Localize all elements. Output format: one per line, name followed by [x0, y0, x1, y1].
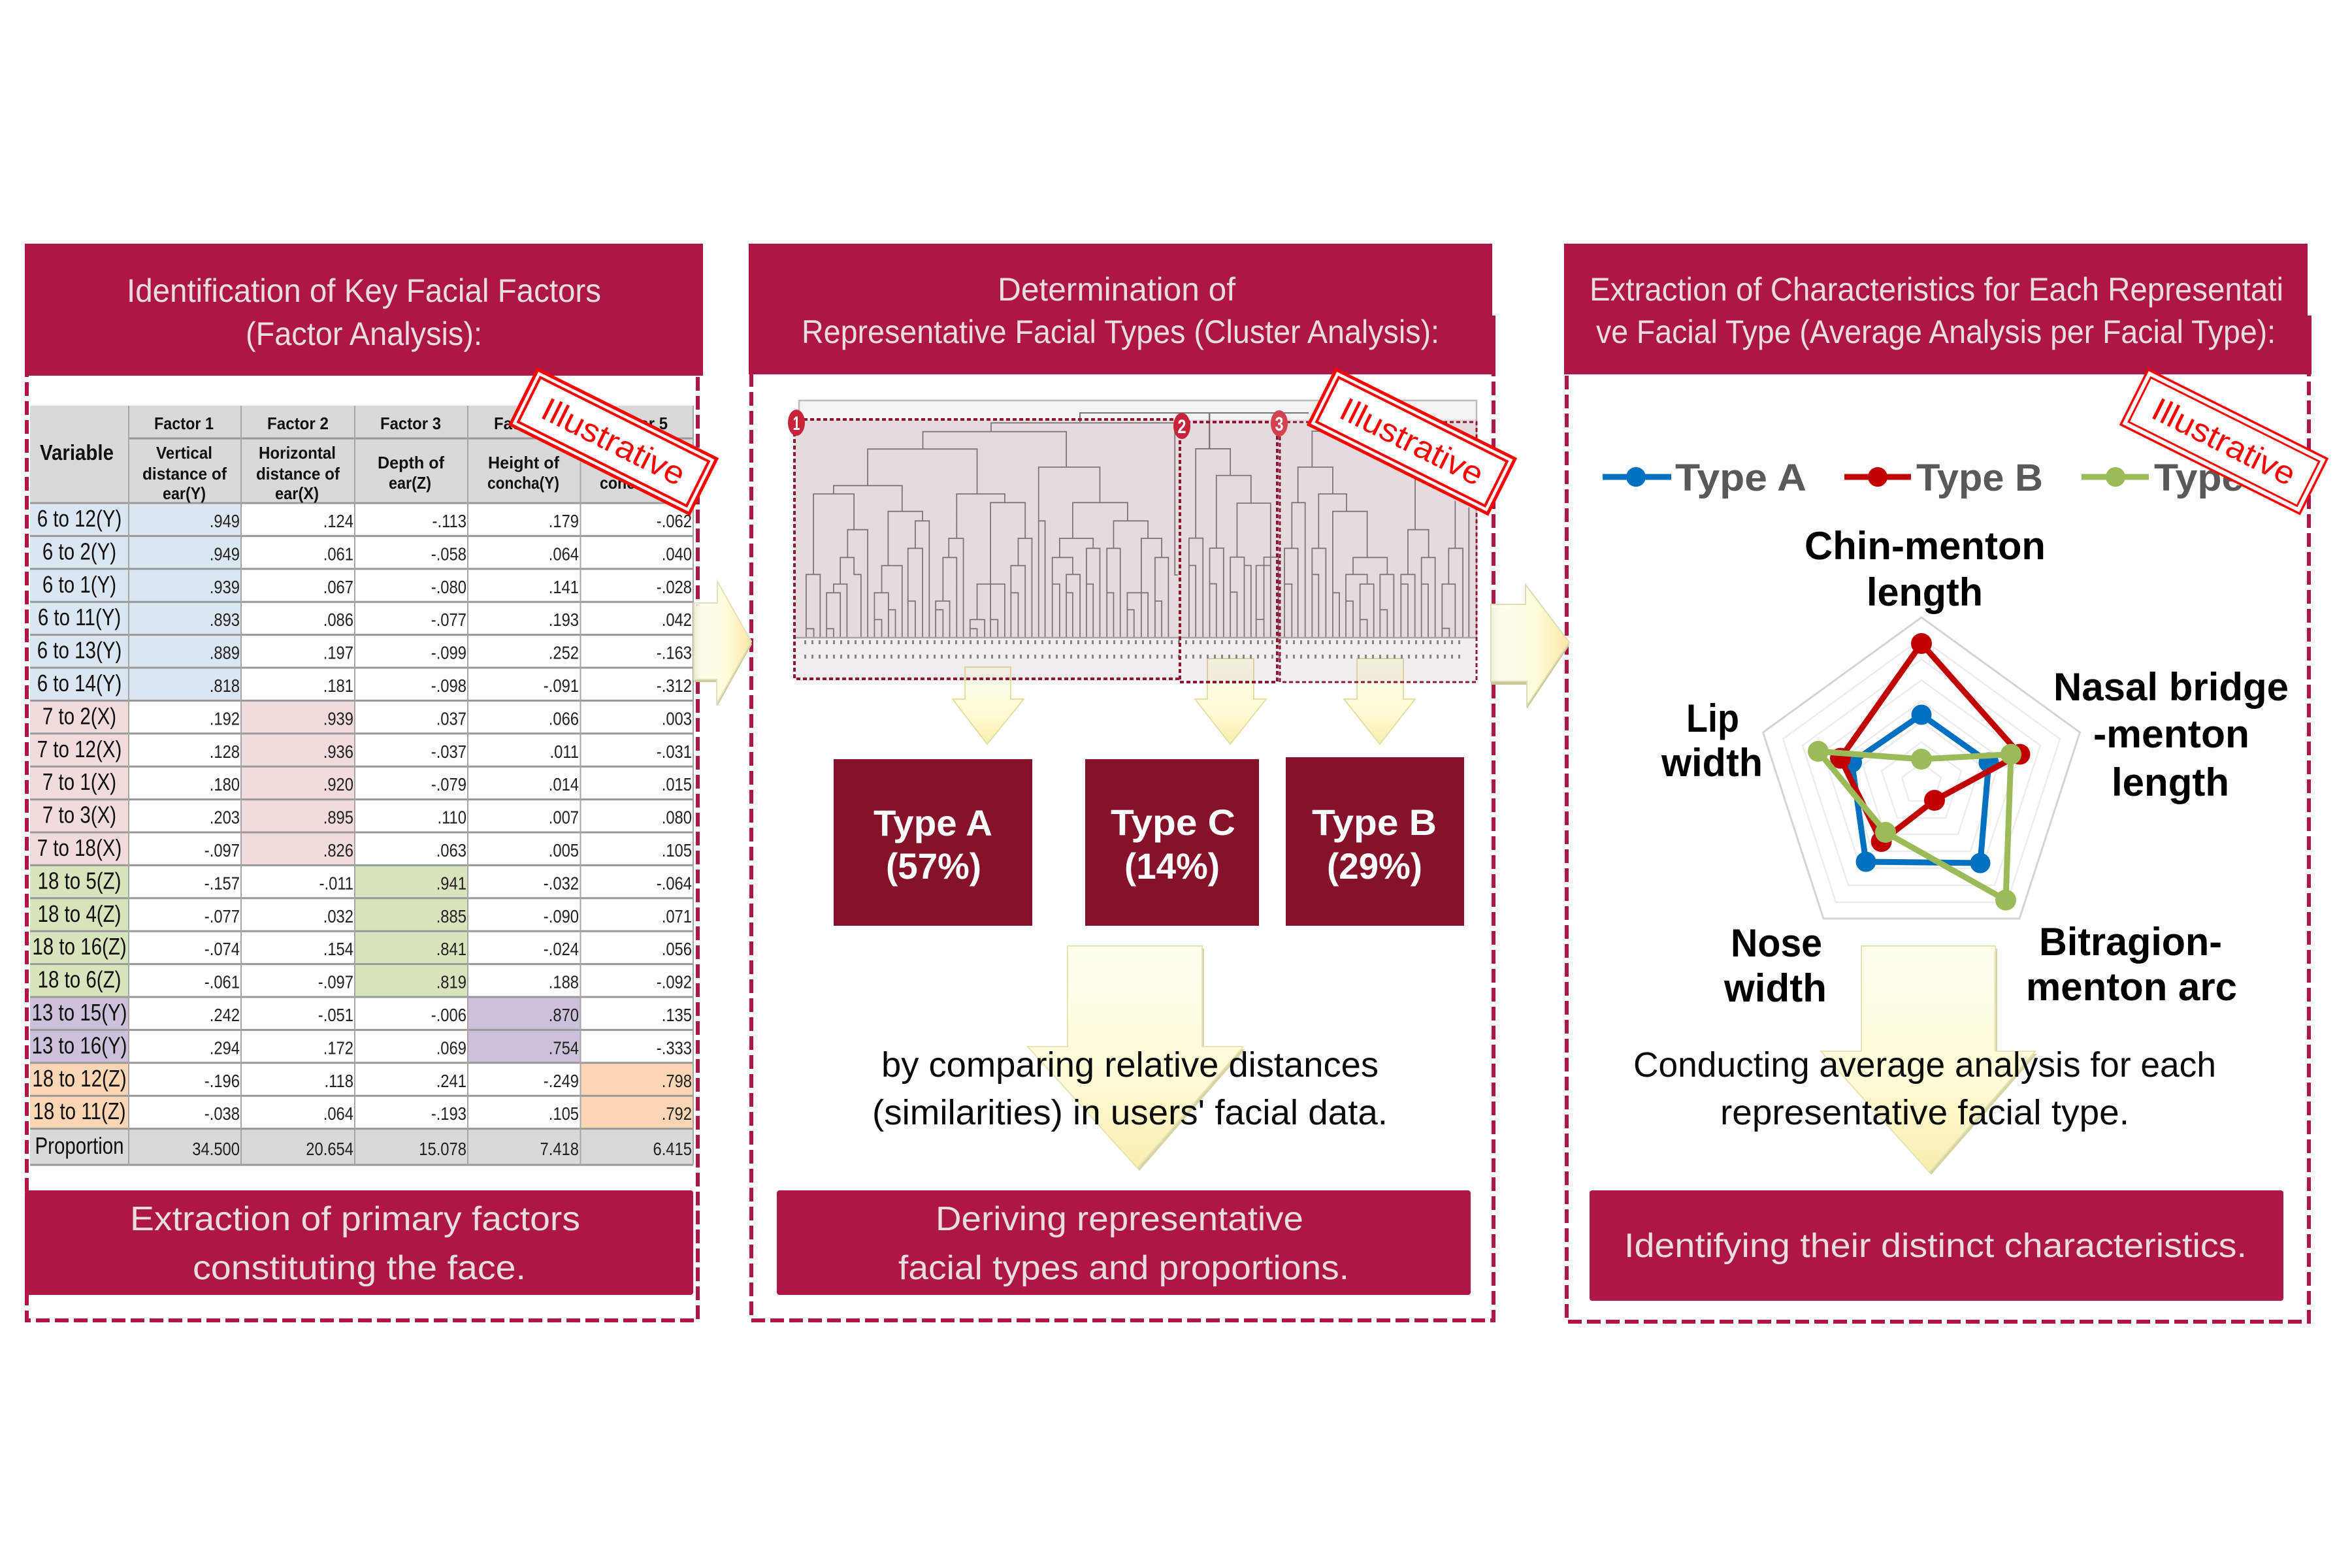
chart legend	[1603, 457, 2283, 499]
type a box: Type A	[874, 802, 992, 843]
radar grid	[1763, 617, 2080, 919]
header: average analysis	[1564, 244, 2311, 374]
factor 5 values: -.163	[657, 642, 692, 663]
table column headers: Factor 1	[154, 414, 214, 433]
factor 2 values: .064	[323, 1103, 353, 1124]
header: factor analysis: (Factor Analysis):	[246, 316, 482, 352]
panel: factor analysis	[25, 244, 717, 1320]
arrow: cluster analysis to average analysis	[1491, 585, 1569, 709]
factor 1 values: .192	[210, 708, 240, 729]
factor 3 values: -.113	[433, 510, 466, 531]
variable labels: 7 to 3(X)	[42, 802, 116, 828]
factor 5 values: .080	[662, 807, 692, 828]
factor 1 values: .203	[210, 807, 240, 828]
factor 4 values: .011	[550, 741, 579, 762]
axis label: chin-menton length: Chin-menton	[1805, 524, 2046, 568]
axis label: nasal bridge-menton length: length	[2112, 760, 2229, 804]
axis label: nose width	[1723, 921, 1827, 1010]
factor 5 values: .798	[662, 1070, 692, 1091]
factor 3 values: -.193	[431, 1103, 466, 1124]
factor 5 values: .135	[662, 1004, 692, 1025]
chart legend: Type A	[1675, 457, 1806, 499]
panel: cluster analysis	[749, 244, 1515, 1320]
factor 4 values: -.249	[544, 1070, 579, 1091]
cluster number badges: 2	[1177, 416, 1186, 438]
variable labels: 7 to 1(X)	[42, 768, 116, 795]
header: cluster analysis: Determination of	[998, 271, 1235, 308]
variable labels: 18 to 6(Z)	[38, 966, 121, 992]
cluster description text: by comparing relative distances	[881, 1045, 1379, 1085]
factor 5 values: .056	[662, 938, 692, 960]
factor 4 values: .064	[549, 544, 579, 564]
stamp: illustrative: Illustrative	[536, 391, 691, 493]
factor 4 values: -.091	[544, 675, 579, 696]
factor 5 values: .792	[662, 1103, 692, 1124]
footer: primary factors: constituting the face.	[193, 1249, 526, 1287]
footer: distinct characteristics	[1590, 1190, 2283, 1301]
factor 3 values: -.077	[431, 609, 466, 630]
factor 2 values: -.051	[318, 1004, 353, 1025]
small arrows from dendrogram to types	[953, 659, 1415, 744]
variable labels: 6 to 1(Y)	[42, 571, 116, 597]
factor 2 values: .181	[323, 675, 353, 696]
factor 2 values: .154	[323, 938, 353, 960]
factor 5 values: .042	[662, 609, 692, 630]
factor 2 values: .067	[323, 576, 353, 597]
factor 1 values: -.038	[204, 1103, 240, 1124]
axis label: bitragion-menton arc	[2026, 920, 2237, 1009]
axis label: lip width: Lip	[1686, 696, 1739, 740]
type b box: Type B	[1312, 802, 1437, 843]
factor 4 values	[540, 510, 579, 1159]
factor 5 values: -.064	[657, 873, 692, 894]
factor 3 values: .241	[436, 1070, 466, 1091]
factor 1 values: -.196	[204, 1070, 240, 1091]
table column headers: Factor 3	[380, 414, 441, 433]
factor 1 values: .949	[210, 544, 240, 564]
table column headers: concha(X)	[600, 473, 673, 493]
factor 3 values: -.006	[431, 1004, 466, 1025]
factor 5 values: -.092	[657, 972, 692, 992]
table column headers: ear(Y)	[163, 483, 206, 503]
type b box	[1286, 757, 1464, 926]
factor 4 values: .754	[549, 1037, 579, 1058]
variable labels: Proportion	[35, 1132, 124, 1159]
type a box	[834, 759, 1032, 926]
header: average analysis: Extraction of Characteristics for Each Representati	[1590, 271, 2283, 308]
factor 1 values: .818	[210, 675, 240, 696]
factor 4 values: -.090	[544, 906, 579, 926]
factor 2 values: .118	[324, 1070, 353, 1091]
arrow: factor analysis to cluster analysis	[694, 581, 752, 706]
variable labels: 6 to 14(Y)	[37, 670, 122, 696]
radar chart	[1661, 524, 2289, 1010]
footer: primary factors: Extraction of primary factors	[130, 1200, 580, 1238]
axis label: chin-menton length	[1805, 524, 2046, 614]
factor 4 values: .014	[549, 774, 579, 795]
factor 1 values: -.157	[204, 873, 240, 894]
factor 3 values: -.080	[431, 576, 466, 597]
factor 4 values: .007	[549, 807, 579, 828]
cluster number badges	[788, 410, 1288, 439]
factor 5 values: -.028	[657, 576, 692, 597]
factor 1 values: -.077	[204, 906, 240, 926]
footer: distinct characteristics: Identifying their distinct characteristics.	[1624, 1227, 2247, 1265]
panel: average analysis	[1564, 244, 2327, 1322]
factor 5 values: .071	[662, 906, 692, 926]
factor 2 values: .920	[323, 774, 353, 795]
factor 3 values: .063	[436, 840, 466, 860]
variable labels: 7 to 12(X)	[37, 736, 122, 762]
big arrow: chart to characteristics	[1821, 946, 2037, 1175]
factor 5 values	[653, 510, 692, 1159]
factor 2 values: .061	[323, 544, 353, 564]
series: type a	[1842, 704, 1999, 873]
factor 3 values: -.098	[431, 675, 466, 696]
factor 1 values: .180	[210, 774, 240, 795]
variable labels: 6 to 2(Y)	[42, 538, 116, 564]
variable labels	[32, 505, 127, 1159]
variable labels: 18 to 12(Z)	[32, 1065, 127, 1091]
factor 3 values: -.058	[431, 544, 466, 564]
table column headers: distance of	[142, 464, 227, 483]
factor 2 values: .939	[323, 708, 353, 729]
cluster 3 tree	[1284, 431, 1469, 638]
factor 2 values: .086	[323, 609, 353, 630]
factor 3 values: .819	[436, 972, 466, 992]
factor 5 values: .040	[662, 544, 692, 564]
type a box: (57%)	[886, 845, 981, 887]
factor 4 values: .179	[549, 510, 579, 531]
chart legend: Type B	[1916, 457, 2043, 499]
average analysis description text: representative facial type.	[1720, 1093, 2129, 1132]
factor 1 values: -.097	[204, 840, 240, 860]
header: cluster analysis: Representative Facial Types (Cluster Analysis):	[802, 314, 1439, 350]
table column headers: Vertical	[156, 443, 212, 463]
table column headers: Horizontal	[259, 443, 336, 463]
factor loading table	[30, 406, 693, 1165]
series: type c	[1808, 741, 2021, 911]
factor 4 values: 7.418	[540, 1138, 579, 1159]
footer: representative facial types: Deriving representative	[936, 1200, 1303, 1238]
variable labels: 18 to 11(Z)	[33, 1098, 126, 1124]
factor 5 values: .003	[662, 708, 692, 729]
factor 3 values: 15.078	[419, 1138, 466, 1159]
table column headers: ear(Z)	[389, 473, 431, 493]
table column headers	[40, 414, 673, 503]
factor 3 values: -.037	[431, 741, 466, 762]
factor 5 values: 6.415	[653, 1138, 692, 1159]
variable labels: 13 to 15(Y)	[32, 999, 127, 1026]
dendrogram chart	[788, 400, 1477, 682]
footer: representative facial types: facial types and proportions.	[898, 1249, 1349, 1287]
factor 1 values	[192, 510, 240, 1159]
factor 3 values: .841	[436, 938, 466, 960]
factor 2 values: .936	[323, 741, 353, 762]
axis label: lip width	[1661, 696, 1763, 785]
stamp: illustrative	[2121, 370, 2327, 514]
factor 5 values: .015	[662, 774, 692, 795]
variable labels: 18 to 16(Z)	[32, 933, 127, 960]
axis label: lip width: width	[1661, 741, 1763, 785]
factor 1 values: .294	[210, 1037, 240, 1058]
factor 3 values: -.079	[431, 774, 466, 795]
axis label: chin-menton length: length	[1867, 570, 1983, 614]
table column headers: Factor 5	[607, 414, 668, 433]
big arrow: types to proportions	[1028, 946, 1245, 1171]
type b box: (29%)	[1327, 845, 1422, 887]
factor 5 values: -.333	[657, 1037, 692, 1058]
axis label: nasal bridge-menton length: Nasal bridge	[2053, 665, 2289, 709]
stamp: illustrative	[510, 370, 717, 514]
factor 4 values: .252	[549, 642, 579, 663]
factor 3 values: .110	[437, 807, 466, 828]
axis label: nose width: width	[1723, 966, 1827, 1010]
factor 1 values: -.061	[204, 972, 240, 992]
header: factor analysis: Identification of Key Facial Factors	[127, 272, 601, 309]
table column headers: Depth of	[378, 453, 444, 472]
factor 4 values: .141	[549, 576, 579, 597]
factor 3 values: .941	[436, 873, 466, 894]
type c box	[1085, 759, 1259, 926]
series: type b	[1830, 633, 2031, 852]
factor 1 values: .889	[210, 642, 240, 663]
factor 2 values: .124	[323, 510, 353, 531]
cluster 2 tree	[1189, 413, 1279, 638]
variable labels: 7 to 2(X)	[42, 703, 116, 729]
factor 4 values: .188	[549, 972, 579, 992]
stamp: illustrative: Illustrative	[2146, 391, 2302, 493]
axis label: nose width: Nose	[1731, 921, 1822, 965]
table column headers: Factor 4	[494, 414, 555, 433]
dotted cluster boxes	[794, 419, 1477, 682]
variable labels: 7 to 18(X)	[37, 834, 122, 861]
chart legend: Type C	[2154, 457, 2283, 499]
variable labels: 18 to 4(Z)	[38, 900, 121, 926]
factor 2 values: .172	[323, 1037, 353, 1058]
header: cluster analysis	[749, 244, 1495, 374]
cluster number badges: 1	[793, 413, 800, 434]
variable labels: 13 to 16(Y)	[32, 1032, 127, 1058]
cluster 1 tree	[806, 423, 1178, 638]
factor 1 values: .128	[210, 741, 240, 762]
header: factor analysis	[25, 244, 703, 376]
stamp: illustrative	[1309, 370, 1515, 514]
axis label: nasal bridge-menton length: -menton	[2093, 712, 2249, 756]
factor 5 values: -.062	[657, 510, 692, 531]
type c box: Type C	[1111, 802, 1235, 843]
table column headers: ear(X)	[275, 483, 319, 503]
factor 2 values: -.097	[318, 972, 353, 992]
factor 3 values: .885	[436, 906, 466, 926]
table column headers: concha(Y)	[487, 473, 559, 493]
variable labels: 6 to 12(Y)	[37, 505, 122, 532]
axis label: nasal bridge-menton length	[2053, 665, 2289, 804]
factor 2 values	[306, 510, 353, 1159]
table column headers: distance of	[256, 464, 340, 483]
factor 2 values: .895	[323, 807, 353, 828]
factor 4 values: .193	[549, 609, 579, 630]
variable labels: 6 to 13(Y)	[37, 637, 122, 663]
factor 5 values: -.312	[657, 675, 692, 696]
factor 1 values: .893	[210, 609, 240, 630]
factor 1 values: 34.500	[192, 1138, 240, 1159]
average analysis description text	[1633, 1045, 2216, 1132]
table column headers: Height of	[488, 453, 559, 472]
factor 4 values: .066	[549, 708, 579, 729]
factor 2 values: .826	[323, 840, 353, 860]
average analysis description text: Conducting average analysis for each	[1633, 1045, 2216, 1085]
factor 5 values: .105	[662, 840, 692, 860]
factor 2 values: .032	[323, 906, 353, 926]
factor 5 values: -.031	[657, 741, 692, 762]
factor 3 values	[419, 510, 466, 1159]
axis label: bitragion-menton arc: Bitragion-	[2039, 920, 2222, 964]
footer: primary factors	[25, 1190, 693, 1295]
cluster number badges: 3	[1275, 414, 1283, 435]
factor 4 values: -.032	[544, 873, 579, 894]
factor 2 values: .197	[323, 642, 353, 663]
factor 4 values: .005	[549, 840, 579, 860]
factor 1 values: .939	[210, 576, 240, 597]
factor 3 values: .037	[436, 708, 466, 729]
cluster description text: (similarities) in users' facial data.	[872, 1093, 1388, 1132]
factor 4 values: .105	[549, 1103, 579, 1124]
cluster description text	[872, 1045, 1388, 1132]
footer: representative facial types	[777, 1190, 1471, 1295]
table column headers: Variable	[40, 440, 114, 465]
factor 4 values: -.024	[544, 938, 579, 960]
stamp: illustrative: Illustrative	[1334, 391, 1490, 493]
table cell shading	[30, 406, 693, 1165]
factor 1 values: .242	[210, 1004, 240, 1025]
axis label: bitragion-menton arc: menton arc	[2026, 965, 2237, 1009]
factor 3 values: .069	[436, 1037, 466, 1058]
factor 1 values: -.074	[204, 938, 240, 960]
factor 4 values: .870	[549, 1004, 579, 1025]
table column headers: Factor 2	[267, 414, 329, 433]
type c box: (14%)	[1124, 845, 1220, 887]
variable labels: 18 to 5(Z)	[38, 868, 121, 894]
variable labels: 6 to 11(Y)	[38, 604, 121, 630]
factor 3 values: -.099	[431, 642, 466, 663]
factor 2 values: 20.654	[306, 1138, 353, 1159]
header: average analysis: ve Facial Type (Average Analysis per Facial Type):	[1596, 314, 2276, 350]
table column headers: Width of	[604, 453, 670, 472]
factor 1 values: .949	[210, 510, 240, 531]
factor 2 values: -.011	[319, 873, 353, 894]
